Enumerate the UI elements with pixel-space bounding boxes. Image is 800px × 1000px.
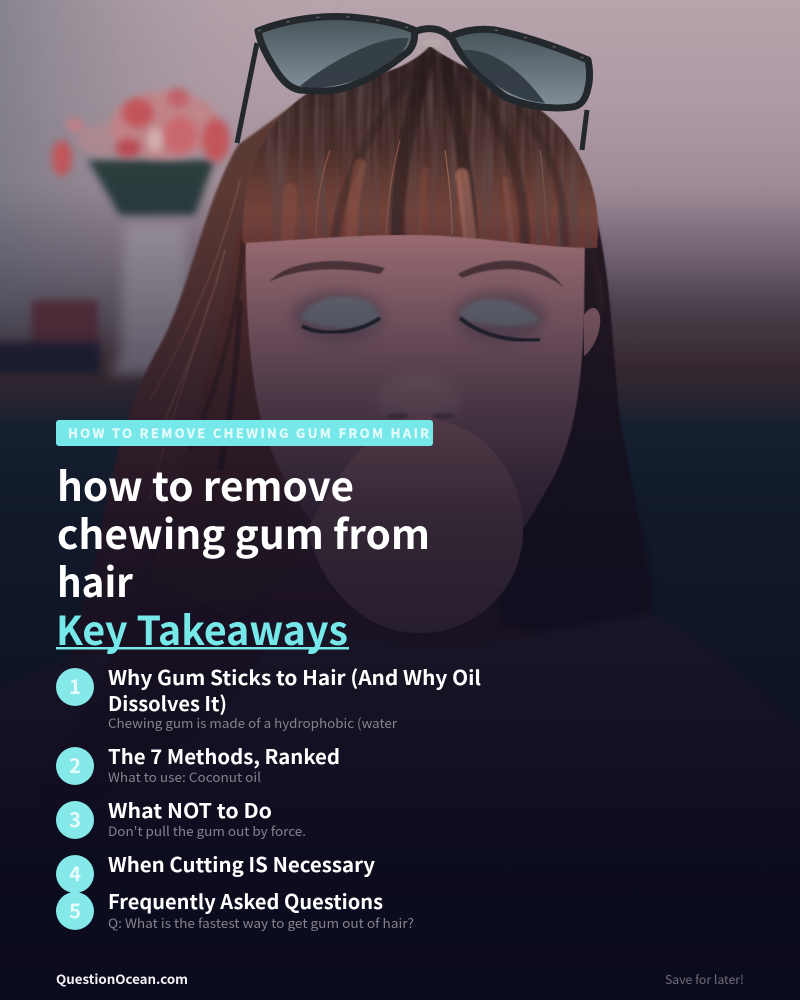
heading 1: [108, 662, 481, 717]
eyebrows: [269, 261, 564, 288]
hair back: [57, 100, 651, 819]
number badge 3: 3: [69, 804, 81, 833]
title: chewing gum from: [57, 503, 430, 561]
temples: [237, 43, 257, 143]
heading 3: What NOT to Do: [108, 795, 272, 824]
takeaway 4: [56, 849, 376, 893]
description 1: Chewing gum is made of a hydrophobic (water: [108, 713, 398, 732]
eyes: [292, 290, 546, 342]
number badge 5: [56, 892, 94, 930]
number badge 4: 4: [69, 858, 81, 887]
description 5: Q: What is the fastest way to get gum out of hair?: [108, 913, 414, 932]
description 2: What to use: Coconut oil: [108, 767, 261, 786]
takeaway 1: [56, 662, 481, 732]
heading 2: The 7 Methods, Ranked: [108, 741, 340, 770]
bangs: [242, 46, 598, 248]
sunglasses: [237, 17, 590, 150]
heading 1: Why Gum Sticks to Hair (And Why Oil: [108, 662, 481, 691]
takeaway 3: [56, 795, 306, 840]
lens reflections: [300, 38, 408, 88]
nose: [378, 372, 460, 420]
title: how to remove: [57, 455, 354, 513]
number badge 2: [56, 747, 94, 785]
number badge 5: 5: [69, 895, 81, 924]
blurred flower vase: [52, 88, 230, 375]
blurred shelf objects: [0, 300, 100, 374]
takeaway 5: [56, 886, 414, 932]
frame speckles: [258, 17, 588, 60]
tag: topic label: [56, 420, 433, 446]
right side hair: [556, 225, 650, 600]
side hair strands: [150, 230, 310, 620]
subtitle: Key Takeaways: Key Takeaways: [56, 599, 348, 657]
tag: topic label: HOW TO REMOVE CHEWING GUM FROM HAIR: [68, 423, 429, 442]
right lens: [451, 29, 590, 108]
heading 1: Dissolves It): [108, 688, 227, 717]
footer: brand: QuestionOcean.com: [56, 969, 188, 988]
face: [245, 230, 585, 584]
footer: save for later: Save for later!: [665, 971, 744, 988]
number badge 4: [56, 855, 94, 893]
description 3: Don't pull the gum out by force.: [108, 821, 306, 840]
nose bridge: [414, 29, 451, 38]
shoulders: [0, 615, 800, 1000]
number badge 2: 2: [69, 750, 81, 779]
heading 4: When Cutting IS Necessary: [108, 849, 376, 878]
ear: [584, 308, 600, 356]
right dark hair: [470, 210, 651, 670]
number badge 1: [56, 668, 94, 706]
number badge 3: [56, 801, 94, 839]
bubble gum: [307, 417, 523, 633]
takeaway 2: [56, 741, 340, 786]
title: [57, 455, 430, 609]
heading 5: Frequently Asked Questions: [108, 886, 383, 915]
number badge 1: 1: [69, 671, 81, 700]
photo background: woman blowing bubble gum: [0, 0, 800, 734]
left lens: [258, 17, 415, 91]
title: hair: [57, 551, 134, 609]
